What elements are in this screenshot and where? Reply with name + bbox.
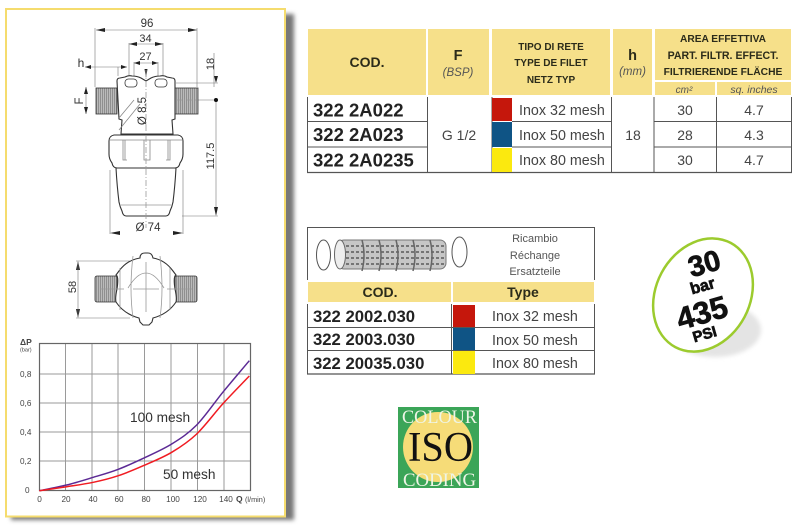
spare part codes: 322 2003.030 [313, 330, 415, 349]
spare part label: Réchange [510, 250, 560, 262]
table header labels: cm² [676, 85, 693, 96]
logo: ISO colour coding: ISO [408, 425, 473, 471]
spare part codes: 322 2002.030 [313, 307, 415, 326]
chart axis labels: 60 [114, 495, 124, 504]
spare part illustration box [308, 228, 594, 280]
spare part codes [313, 307, 424, 373]
table values: 4.7 [744, 152, 764, 168]
table values: Inox 80 mesh [519, 153, 605, 169]
colour swatches [492, 98, 512, 121]
table: main product codes [307, 29, 792, 172]
spare part label: Ersatzteile [509, 266, 561, 278]
bowl [116, 168, 176, 216]
drawing dimension labels [67, 18, 217, 293]
table header labels: TYPE DE FILET [514, 58, 588, 69]
spare parts header: Type [507, 284, 539, 300]
spare part types [492, 309, 578, 372]
table header labels [350, 34, 783, 96]
table values: 4.7 [744, 102, 764, 118]
product codes: 322 2A0235 [313, 150, 414, 170]
table header labels: sq. inches [730, 84, 778, 96]
spare part label: Ricambio [512, 233, 558, 245]
curve: 100 mesh [39, 361, 249, 491]
chart: pressure drop vs flow [20, 337, 265, 504]
product codes [313, 100, 414, 170]
chart axis labels: Q [236, 494, 243, 504]
colour swatches [453, 305, 475, 327]
threaded ports [96, 88, 117, 114]
table header labels: AREA EFFETTIVA [680, 34, 767, 45]
drawing dimension labels: 96 [141, 18, 153, 30]
table values: 4.3 [744, 127, 764, 143]
table header labels: PART. FILTR. EFFECT. [668, 50, 778, 62]
logo: ISO colour coding: CODING [403, 470, 476, 491]
technical drawing: front view [84, 28, 218, 235]
curve label: 50 mesh: 50 mesh [163, 467, 216, 482]
table values: 30 [677, 102, 693, 118]
table values: 28 [677, 127, 693, 143]
icon: filter cartridge and o-rings [316, 237, 467, 271]
table rows [307, 97, 792, 172]
drawing dimension labels: 27 [139, 51, 152, 63]
technical drawing: top view [76, 253, 197, 325]
chart axis labels: 120 [193, 495, 207, 504]
drawing dimension labels: Ø 74 [136, 222, 161, 234]
bowl collar [109, 135, 183, 168]
chart axis labels: 140 [219, 495, 233, 504]
chart axis labels: 0 [37, 495, 42, 504]
spare part types: Inox 80 mesh [492, 356, 578, 372]
chart axis labels: (bar) [20, 348, 32, 354]
chart axis labels: 100 [166, 495, 180, 504]
panel: drawing sheet [6, 9, 294, 520]
drawing dimension labels: 58 [67, 281, 79, 293]
table values: Inox 32 mesh [519, 103, 605, 119]
table header labels: (BSP) [443, 67, 474, 79]
table values: 18 [625, 127, 641, 143]
chart axis labels: 20 [61, 495, 71, 504]
chart axis labels: 80 [141, 495, 151, 504]
spare part types: Inox 32 mesh [492, 309, 578, 325]
badge: 30 bar 435 PSI: bar [688, 275, 717, 298]
centre line [146, 70, 196, 228]
drawing dimension labels: h [78, 56, 84, 70]
product codes: 322 2A023 [313, 124, 404, 145]
table header labels: F [454, 48, 463, 64]
leader lines [119, 100, 140, 130]
drawing dimension labels: 18 [205, 58, 217, 70]
table values: G 1/2 [442, 127, 476, 143]
chart axis labels: 0,4 [20, 428, 32, 437]
chart axis labels: 0,8 [20, 370, 32, 379]
table header [308, 29, 791, 95]
spare part codes: 322 20035.030 [313, 354, 424, 373]
spare parts header [308, 282, 594, 302]
table values [442, 102, 764, 169]
table header labels: NETZ TYP [527, 75, 575, 86]
spare parts header: COD. [362, 284, 398, 300]
badge: 30 bar 435 PSI: 435 [672, 289, 732, 337]
logo: ISO colour coding [398, 407, 479, 491]
drawing dimension labels: Ø 8.5 [137, 97, 149, 125]
dimension arrows [84, 28, 218, 235]
curve label: 100 mesh: 100 mesh [130, 410, 190, 425]
table header labels: (mm) [619, 66, 646, 78]
badge: 30 bar 435 PSI: PSI [691, 323, 719, 346]
logo: ISO colour coding: COLOUR [402, 407, 477, 428]
table header labels: COD. [350, 54, 384, 70]
table values: Inox 50 mesh [519, 128, 605, 144]
dimension lines [85, 28, 218, 234]
drawing dimension labels: F [74, 97, 86, 105]
chart axis labels: (l/min) [245, 495, 265, 504]
curve: 50 mesh [39, 376, 249, 491]
table header labels: h [628, 48, 637, 64]
drawing dimension labels: 117.5 [205, 143, 217, 169]
chart axis labels [20, 337, 265, 504]
chart axis labels: ΔP [20, 337, 32, 347]
badge: 30 bar 435 PSI: 30 [685, 245, 724, 284]
product codes: 322 2A022 [313, 100, 404, 120]
panel: spare parts [307, 228, 595, 374]
chart axis labels: 0,6 [20, 399, 32, 408]
badge: 30 bar 435 PSI [634, 221, 772, 369]
chart axis labels: 0,2 [20, 457, 32, 466]
head body [117, 76, 175, 134]
chart axis labels: 40 [88, 495, 98, 504]
drawing dimension labels: 34 [139, 33, 152, 45]
table header labels: TIPO DI RETE [518, 42, 584, 53]
table values: 30 [677, 152, 693, 168]
spare part types: Inox 50 mesh [492, 333, 578, 349]
spare parts rows [307, 304, 595, 374]
table header labels: FILTRIERENDE FLÄCHE [664, 65, 783, 78]
spare part label [509, 233, 561, 278]
chart axis labels: 0 [25, 486, 30, 495]
